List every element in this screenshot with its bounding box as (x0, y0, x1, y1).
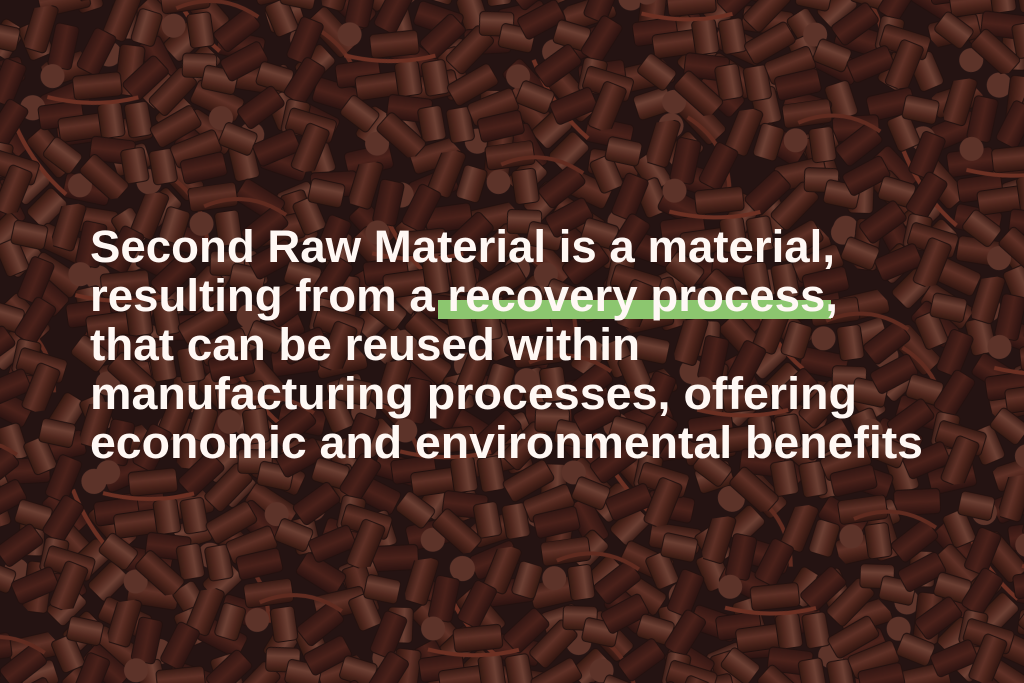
highlight: recovery process (438, 300, 831, 319)
headline text: resulting from a recovery process, (90, 270, 838, 321)
headline text: that can be reused within (90, 319, 640, 370)
headline text (90, 221, 923, 468)
headline text: Second Raw Material is a material, (90, 221, 835, 272)
headline text: economic and environmental benefits (90, 417, 923, 468)
headline text: manufacturing processes, offering (90, 368, 857, 419)
